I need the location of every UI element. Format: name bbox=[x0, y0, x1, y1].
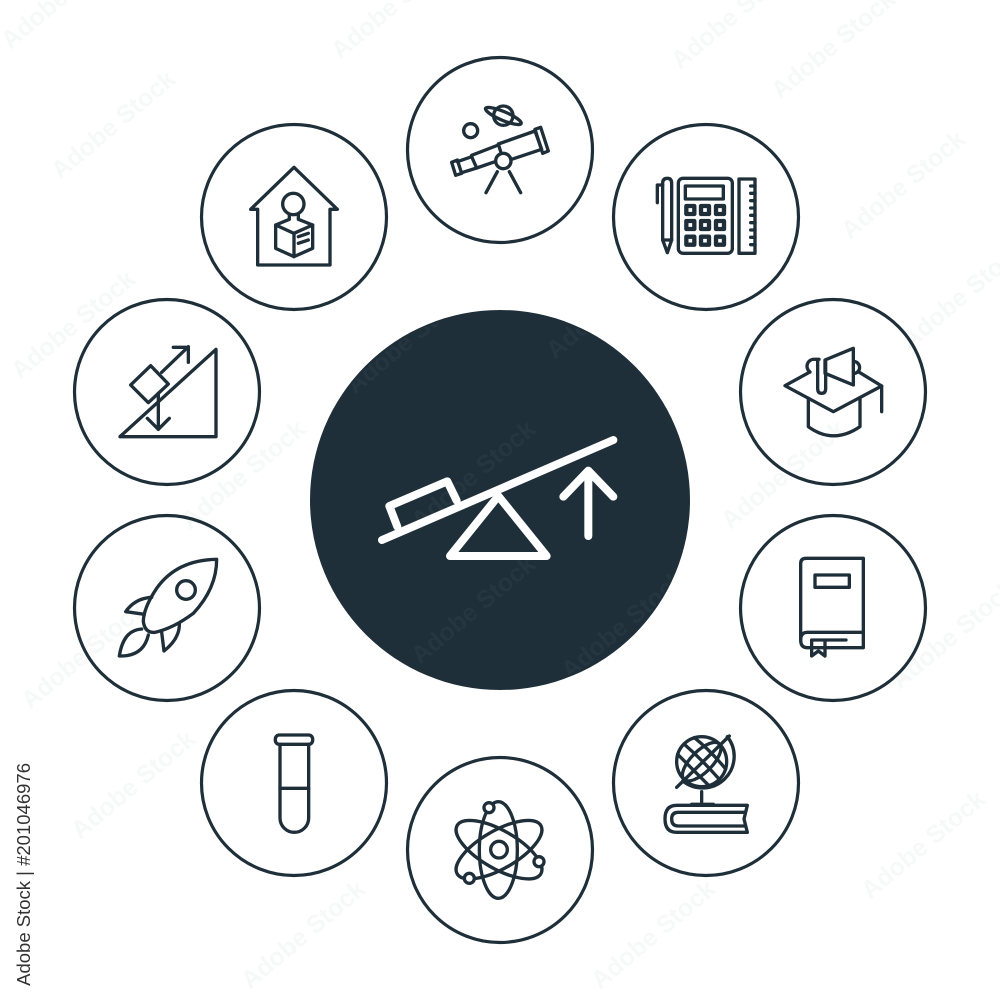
ring: home study circle bbox=[202, 124, 386, 310]
ring: telescope circle bbox=[408, 58, 592, 242]
icon: book with bookmark bbox=[801, 558, 863, 656]
ring: globe circle bbox=[614, 690, 798, 876]
watermarks: Adobe Stock bbox=[46, 65, 181, 185]
watermarks: Adobe Stock bbox=[176, 415, 311, 535]
ring: atom circle bbox=[408, 758, 592, 942]
watermarks on dark circle: Adobe Stock bbox=[541, 245, 676, 365]
watermarks: Adobe Stock bbox=[66, 725, 201, 845]
ring: graduation cap circle bbox=[740, 300, 926, 484]
icon: graduation cap with megaphone bbox=[785, 348, 882, 436]
icon: home study reader bbox=[251, 167, 337, 265]
ring: incline circle bbox=[74, 300, 260, 484]
watermarks: Adobe Stock bbox=[6, 265, 141, 385]
side credit text: Adobe Stock | #201046976 bbox=[13, 763, 34, 986]
ring: calculator circle bbox=[614, 124, 798, 310]
icon: test tube bbox=[275, 735, 313, 832]
icon: pen, calculator and ruler bbox=[657, 178, 755, 253]
watermarks: Adobe Stock bbox=[856, 785, 991, 905]
watermarks on dark circle: Adobe Stock bbox=[556, 565, 691, 685]
watermarks on dark circle: Adobe Stock bbox=[406, 550, 541, 670]
watermarks: Adobe Stock bbox=[586, 875, 721, 995]
ring: book circle bbox=[740, 516, 926, 700]
central dark circle bbox=[310, 310, 690, 690]
icon: globe on book bbox=[665, 736, 747, 832]
icon: block on inclined plane bbox=[120, 347, 216, 437]
watermarks on dark circle: Adobe Stock bbox=[406, 415, 541, 535]
watermarks: Adobe Stock bbox=[836, 125, 971, 245]
watermarks: Adobe Stock bbox=[16, 595, 151, 715]
ring: rocket circle bbox=[74, 516, 260, 700]
icon: telescope with planets bbox=[452, 104, 548, 193]
icon: rocket bbox=[119, 559, 217, 656]
watermarks: Adobe Stock bbox=[716, 415, 851, 535]
watermarks: Adobe Stock bbox=[236, 875, 371, 995]
icon: atom bbox=[448, 802, 550, 898]
ring: test tube circle bbox=[202, 690, 386, 876]
watermarks on dark circle bbox=[341, 245, 691, 685]
watermarks on dark circle: Adobe Stock bbox=[341, 280, 476, 400]
icon: seesaw with up arrow bbox=[382, 440, 613, 556]
